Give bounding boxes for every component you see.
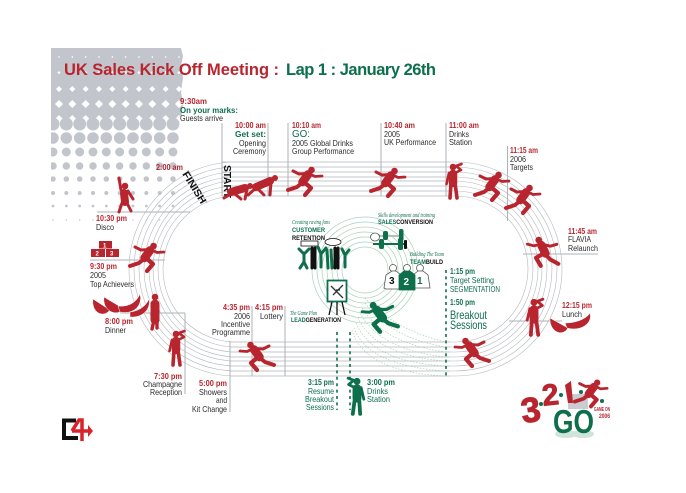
- start and finish labels: START: [221, 165, 232, 198]
- evening schedule text: and: [216, 395, 227, 405]
- morning schedule text: Drinks: [449, 129, 469, 139]
- logo: 3 2 1 GO: [518, 378, 611, 440]
- morning schedule text: 11:15 am: [510, 145, 538, 155]
- morning schedule text: 11:45 am: [568, 226, 597, 236]
- evening schedule text: 7:30 pm: [154, 371, 182, 381]
- concentric target circles: [312, 217, 446, 376]
- morning schedule text: 9:30am: [180, 96, 207, 106]
- afternoon green schedule text: Resume: [308, 386, 334, 396]
- label: sales conversion: SALESCONVERSION: [378, 219, 433, 226]
- morning schedule text: Guests arrive: [180, 113, 223, 123]
- runner 4:35: [240, 342, 274, 370]
- evening schedule text: Programme: [212, 327, 250, 337]
- dinner figure: [152, 294, 158, 329]
- runner 10:40: [371, 168, 405, 196]
- podium icon: 1: [103, 244, 107, 250]
- label: customer retention: RETENTION: [292, 235, 325, 242]
- red athlete figures: [119, 164, 562, 370]
- label: customer retention: CUSTOMER: [292, 227, 325, 234]
- evening schedule text: Disco: [96, 222, 114, 232]
- morning schedule text: Opening: [239, 138, 266, 148]
- evening schedule text: Top Achievers: [90, 279, 134, 289]
- evening schedule text: 9:30 pm: [90, 261, 117, 271]
- fruit slices dinner: [93, 294, 149, 317]
- afternoon green schedule text: Breakout: [305, 394, 335, 404]
- afternoon green schedule text: 1:50 pm: [450, 297, 475, 307]
- evening schedule text: 4:15 pm: [255, 302, 283, 312]
- morning schedule text: 12:15 pm: [562, 300, 592, 310]
- icon: team jerseys: 1: [417, 276, 423, 287]
- morning schedule text: Group Performance: [292, 146, 354, 156]
- icon: flip chart: [328, 280, 346, 315]
- icon: dumbbells: [370, 229, 407, 250]
- label: sales conversion: [378, 213, 435, 226]
- evening schedule text: Lottery: [260, 311, 284, 321]
- evening schedule text: 8:00 pm: [105, 316, 133, 326]
- evening schedule text: 2:00 am: [156, 162, 183, 172]
- morning schedule text: [180, 96, 598, 319]
- label: sales conversion: Skills development and training: [378, 213, 435, 219]
- afternoon green schedule text: 1:15 pm: [450, 266, 475, 276]
- afternoon green schedule text: Sessions: [450, 318, 487, 332]
- timeline marker lines: [90, 123, 598, 412]
- crouching starter 1: [224, 183, 253, 199]
- morning schedule text: 10:10 am: [292, 120, 321, 130]
- fruit slices lunch: [550, 313, 590, 333]
- logo: 3 2 1 GO: 2006: [599, 414, 611, 420]
- morning schedule text: Relaunch: [568, 243, 598, 253]
- morning schedule text: 10:40 am: [384, 120, 415, 130]
- afternoon green schedule text: 3:15 pm: [308, 377, 334, 387]
- label: team build: TEAMBUILD: [410, 259, 443, 266]
- label: customer retention: Creating raving fans: [292, 219, 331, 226]
- icon: team jerseys: 2: [404, 277, 410, 288]
- running track: [129, 162, 562, 376]
- runner 1:00: [455, 338, 489, 366]
- label: team build: Building The Team: [410, 252, 444, 258]
- morning schedule text: Get set:: [235, 129, 266, 139]
- start and finish labels: FINISH: [179, 170, 208, 206]
- evening schedule text: Dinner: [105, 325, 126, 335]
- morning schedule text: 2006: [510, 154, 526, 164]
- champagne figure: [170, 331, 184, 365]
- evening schedule text: Reception: [150, 387, 182, 397]
- runner 11:15 b: [506, 185, 540, 213]
- standing 12:15: [527, 299, 543, 335]
- morning schedule text: Station: [449, 137, 472, 147]
- label: lead generation: LEADGENERATION: [291, 317, 341, 324]
- disco figure: [119, 178, 133, 212]
- evening schedule text: Kit Change: [192, 404, 227, 414]
- drinker 11:00: [446, 164, 462, 198]
- afternoon green schedule text: Drinks: [367, 386, 388, 396]
- morning schedule text: 11:00 am: [449, 120, 479, 130]
- logo: C4: [64, 420, 93, 441]
- runner 11:45: [524, 235, 562, 269]
- evening schedule text: 5:00 pm: [199, 378, 227, 388]
- label: lead generation: [290, 311, 341, 324]
- morning schedule text: 10:00 am: [235, 120, 266, 130]
- morning schedule text: Targets: [510, 162, 533, 172]
- afternoon green schedule text: Breakout: [450, 308, 488, 322]
- green dashed schedule lines: [337, 270, 446, 410]
- evening schedule text: 2006: [234, 311, 250, 321]
- title: [64, 61, 436, 79]
- morning schedule text: 2005 Global Drinks: [292, 138, 353, 148]
- logo: 3 2 1 GO: GAME ON: [594, 407, 610, 413]
- label: team build: [410, 252, 444, 266]
- morning schedule text: On your marks:: [180, 105, 238, 115]
- icon: crowd with signs: [299, 238, 349, 268]
- morning schedule text: Lunch: [562, 309, 582, 319]
- halftone background pattern: [45, 44, 184, 234]
- evening schedule text: Champagne: [143, 379, 182, 389]
- morning schedule text: 2005: [384, 129, 400, 139]
- label: customer retention: [292, 219, 331, 242]
- podium icon: [91, 241, 119, 258]
- podium icon: 2: [96, 252, 100, 258]
- icon: team jerseys: [384, 264, 430, 290]
- podium icon: 3: [110, 252, 114, 258]
- icon: team jerseys: 3: [389, 276, 395, 287]
- evening schedule text: Showers: [199, 387, 227, 397]
- afternoon green schedule text: [305, 266, 500, 412]
- afternoon green schedule text: 3:00 pm: [367, 377, 395, 387]
- label: lead generation: The Game Plan: [290, 311, 317, 317]
- runner 9:30: [130, 243, 164, 271]
- title: Lap 1 : January 26th: [286, 61, 436, 79]
- afternoon green schedule text: Station: [367, 394, 390, 404]
- evening schedule text: [90, 162, 284, 414]
- title: UK Sales Kick Off Meeting :: [64, 61, 279, 79]
- runner 11:15 a: [475, 172, 509, 200]
- logo: 3 2 1 GO: 3: [518, 390, 543, 431]
- afternoon green schedule text: Target Setting: [450, 275, 494, 285]
- evening schedule text: Incentive: [221, 319, 250, 329]
- morning schedule text: GO:: [292, 129, 310, 140]
- green runner: [362, 302, 398, 332]
- evening schedule text: 10:30 pm: [96, 213, 127, 223]
- evening schedule text: 2005: [90, 270, 106, 280]
- green drinker figure: [348, 378, 364, 414]
- logo: 3 2 1 GO: 2: [540, 378, 560, 413]
- morning schedule text: UK Performance: [384, 137, 436, 147]
- crouching starter 2: [248, 175, 278, 195]
- runner 10:10: [288, 167, 322, 195]
- afternoon green schedule text: SEGMENTATION: [450, 284, 500, 294]
- start and finish labels: [179, 165, 232, 206]
- evening schedule text: 4:35 pm: [223, 302, 250, 312]
- afternoon green schedule text: Sessions: [306, 402, 334, 412]
- logo: 3 2 1 GO: GO: [553, 403, 594, 440]
- morning schedule text: Ceremony: [233, 146, 267, 156]
- morning schedule text: FLAVIA: [568, 234, 591, 244]
